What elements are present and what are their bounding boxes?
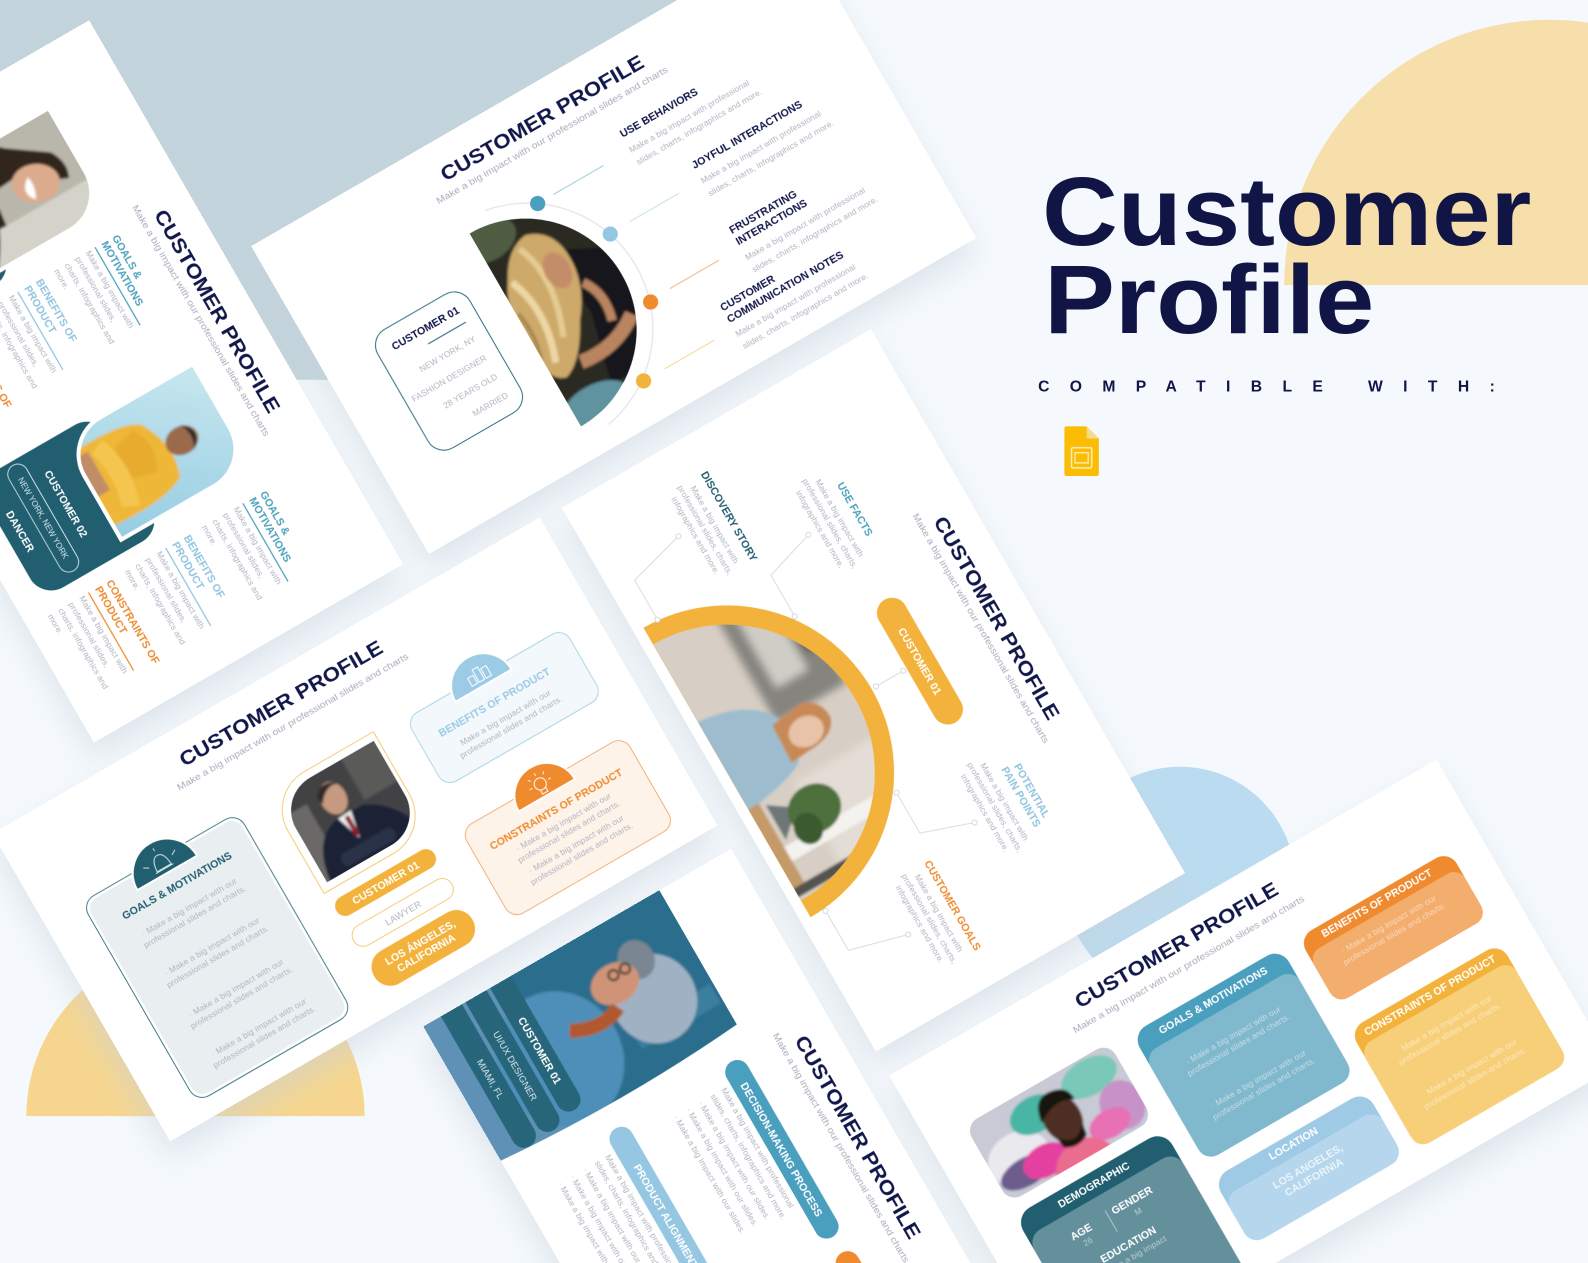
card: constraints of product <box>451 719 675 919</box>
pill: location: CALIFORNIA <box>395 932 458 975</box>
customer info box: MARRIED <box>471 390 510 418</box>
heading: CUSTOMER PROFILE <box>175 636 387 771</box>
block: decision-making process: DECISION-MAKING PROCESS <box>738 1081 824 1219</box>
card: benefits of product <box>1298 851 1488 1004</box>
card: goals and motivations: · Make a big impact with our <box>209 996 308 1059</box>
card: constraints of product: · Make a big impact with our <box>514 791 613 853</box>
item: use facts: infographics and more. <box>794 489 847 570</box>
card: goals and motivations: professional slides and charts. <box>165 923 271 990</box>
customer 01 teal tab <box>0 158 15 343</box>
card: location <box>1213 1091 1404 1245</box>
card: benefits of product: · Make a big impact with our <box>1339 893 1438 955</box>
connector: use facts <box>759 531 844 620</box>
item: customer goals: professional slides, charts, <box>900 872 959 966</box>
connector: discovery story <box>623 533 713 623</box>
heading: CUSTOMER PROFILE <box>790 1032 925 1243</box>
item: frustrating interactions: Make a big impact with professional <box>743 185 867 262</box>
card: constraints B: professional slides, <box>67 600 112 669</box>
item: customer goals: CUSTOMER GOALS <box>922 858 983 953</box>
card: benefits of product <box>395 608 603 787</box>
card: goals and motivations: professional slides and charts. <box>211 1003 317 1070</box>
customer info box: NEW YORK, NY <box>418 334 478 374</box>
block: product alignment <box>546 1122 727 1263</box>
item: use behaviors: slides, charts, infographics and more. <box>634 87 764 167</box>
pill: orange block <box>831 1247 953 1263</box>
shape: yellow semicircle top right <box>1284 20 1588 285</box>
card: constraints of product: · Make a big impact with our <box>527 812 626 875</box>
pill: occupation: LAWYER <box>383 899 424 929</box>
customer info box: FASHION DESIGNER <box>410 353 489 404</box>
card: goals and motivations B: GOALS & <box>257 489 292 538</box>
item: customer goals: Make a big impact with <box>913 873 966 954</box>
item: frustrating interactions: INTERACTIONS <box>734 197 810 248</box>
card: goals and motivations B: professional slides, <box>221 511 267 580</box>
card: benefits A: BENEFITS OF <box>33 277 79 345</box>
card: goals and motivations <box>73 798 353 1103</box>
card: benefits B: Make a big impact with <box>154 549 207 631</box>
card: benefits B: professional slides, <box>144 556 189 624</box>
subheading: Make a big impact with our professional slides and charts <box>435 65 670 207</box>
block: decision-making process: · Make a big impact with our slides. <box>672 1113 748 1236</box>
item: customer communication notes: slides, charts, infographics and more. <box>741 271 870 351</box>
location pill: NEW YORK, NEW YORK <box>16 476 70 561</box>
item: customer communication notes: Make a big impact with professional <box>734 262 857 339</box>
item: customer communication notes: CUSTOMER <box>718 273 778 314</box>
pill: city <box>441 1004 540 1152</box>
item: joyful interactions: Make a big impact with professional <box>699 109 823 186</box>
shape: blue circle bottom right <box>1064 767 1295 998</box>
pill: customer: CUSTOMER 01 <box>515 1015 563 1087</box>
panel: slide with filled cards <box>889 760 1588 1263</box>
card: benefits of product: professional slides and charts. <box>458 694 564 761</box>
card: goals and motivations B: Make a big impact with <box>232 505 284 586</box>
card: demographic: DEMOGRAPHIC <box>1056 1160 1132 1211</box>
item: potential pain points: professional slides, charts, <box>965 760 1025 854</box>
item: potential pain points <box>955 740 1060 860</box>
item: use behaviors <box>542 58 764 211</box>
title: customer profile: Profile <box>1044 245 1374 354</box>
card: constraints of product <box>1349 943 1569 1149</box>
timeline dot 2 <box>600 224 621 244</box>
pill: role <box>465 990 564 1136</box>
subheading: Make a big impact with our professional slides and charts <box>176 651 411 794</box>
item: discovery story: Make a big impact with <box>688 484 741 565</box>
card: benefits B: charts, infographics and <box>133 562 188 647</box>
customer info box: CUSTOMER 01 <box>390 305 462 353</box>
card: location: LOCATION <box>1267 1125 1320 1163</box>
card: constraints B: more. <box>46 612 65 636</box>
card: demographic: M <box>1133 1205 1144 1217</box>
card: goals and motivations A <box>52 233 166 352</box>
item: joyful interactions: slides, charts, infographics and more. <box>706 118 835 198</box>
item: use facts: professional slides, charts, <box>800 477 860 570</box>
item: discovery story: DISCOVERY STORY <box>698 469 759 564</box>
occupation label: DANCER <box>3 509 36 555</box>
card: goals and motivations A: charts, infographics and <box>63 261 117 346</box>
card: benefits B: PRODUCT <box>169 540 206 592</box>
item: discovery story: infographics and more. <box>669 495 722 576</box>
item: frustrating interactions: slides, charts, infographics and more. <box>750 194 879 274</box>
block: decision-making process: Make a big impact with professional <box>719 1086 796 1210</box>
pill: city: MIAMI, FL <box>474 1058 506 1102</box>
shape: blue-gray backdrop <box>0 0 709 380</box>
item: use facts: USE FACTS <box>834 480 875 538</box>
card: goals and motivations: · Make a big impact with our <box>163 915 261 978</box>
arc <box>485 159 698 425</box>
title: customer profile: Customer <box>1042 157 1531 266</box>
location pill <box>4 460 82 576</box>
card: constraints B: PRODUCT <box>92 584 129 637</box>
pill: location: LOS ÁNGELES, <box>383 917 458 968</box>
block: decision-making process: · Make a big impact with our slides. <box>684 1106 760 1228</box>
customer 02 label: CUSTOMER 02 <box>41 468 90 540</box>
customer pill: CUSTOMER 01 <box>895 626 943 697</box>
photo: woman with plant <box>653 624 875 900</box>
photo: man in suit <box>290 740 410 882</box>
timeline dot 1 <box>527 193 548 214</box>
photo: woman in hoodie <box>424 890 737 1161</box>
card: goals and motivations A: MOTIVATIONS <box>99 239 145 308</box>
panel: slide with circular portrait <box>562 329 1185 1051</box>
subheading: Make a big impact with our professional slides and charts <box>770 1032 911 1263</box>
item: potential pain points: infographics and more. <box>959 772 1012 853</box>
card: goals and motivations: · Make a big impact with our <box>1184 1004 1282 1066</box>
heading: CUSTOMER PROFILE <box>437 51 648 186</box>
card: constraints of product: · Make a big impact with our <box>1420 1037 1519 1099</box>
pill: location <box>365 903 482 992</box>
photo: blonde woman <box>470 218 637 426</box>
panel: slide with blue photo <box>424 849 970 1263</box>
pill: customer: CUSTOMER 01 <box>350 859 422 908</box>
subheading: Make a big impact with our professional slides and charts <box>910 512 1051 746</box>
connector: pain points <box>893 763 978 852</box>
item: use behaviors: Make a big impact with professional <box>627 77 751 155</box>
card: goals and motivations: professional slides and charts. <box>142 883 248 950</box>
card: location: LOS ANGELES, <box>1271 1142 1345 1192</box>
card: benefits of product: Make a big impact with our <box>458 687 553 748</box>
card: benefits B: BENEFITS OF <box>181 533 227 601</box>
item: discovery story <box>666 469 760 583</box>
card: goals and motivations: GOALS & MOTIVATIONS <box>120 850 234 922</box>
item: frustrating interactions <box>657 154 879 315</box>
subheading: Make a big impact with our professional slides and charts <box>1071 894 1307 1036</box>
panel: slide with two customers <box>0 20 403 742</box>
heading: CUSTOMER PROFILE <box>929 512 1064 724</box>
pill: role: UI/UX DESIGNER <box>490 1029 539 1103</box>
customer pill <box>871 592 969 730</box>
card: constraints of product: professional slides and charts. <box>1422 1044 1528 1111</box>
pill: customer <box>490 976 585 1116</box>
card: goals and motivations: · Make a big impact with our <box>140 876 239 939</box>
item: potential pain points: Make a big impact with <box>978 761 1031 843</box>
item: customer goals <box>890 858 983 971</box>
item: joyful interactions <box>619 90 835 239</box>
photo: laughing woman <box>0 110 90 268</box>
card: benefits B <box>123 533 237 653</box>
connector: pill to photo <box>873 667 907 690</box>
pill: customer <box>331 845 440 920</box>
card: goals and motivations: professional slides and charts. <box>188 964 294 1031</box>
card: benefits of product: BENEFITS OF PRODUCT <box>1320 867 1435 941</box>
item: potential pain points: POTENTIAL <box>1011 762 1052 821</box>
block: decision-making process <box>662 1055 843 1263</box>
photo frame A <box>0 105 110 287</box>
card: goals and motivations: professional slides and charts. <box>1186 1011 1292 1078</box>
item: discovery story: professional slides, charts, <box>675 483 735 577</box>
card: goals and motivations: professional slides and charts. <box>1211 1055 1317 1122</box>
item: use facts <box>790 462 885 576</box>
card: goals and motivations B: charts, infographics and <box>210 517 265 602</box>
item: customer goals: infographics and more. <box>893 884 946 965</box>
card: benefits A: Make a big impact with <box>6 293 59 375</box>
card: demographic: AGE <box>1069 1222 1094 1243</box>
customer info box <box>369 285 529 457</box>
customer info box: 28 YEARS OLD <box>441 371 499 411</box>
card: constraints B: CONSTRAINTS OF <box>103 578 162 667</box>
card: demographic: 26 <box>1081 1235 1095 1248</box>
icon: google slides <box>1064 426 1099 476</box>
photo frame <box>60 361 254 542</box>
photo: woman in yellow hoodie <box>80 366 234 537</box>
card: goals and motivations <box>1132 948 1355 1162</box>
compatible with label: COMPATIBLE WITH: <box>1038 378 1495 395</box>
card: constraints of product: CONSTRAINTS OF PRODUCT <box>1362 953 1499 1039</box>
photo: man with graffiti <box>970 1048 1148 1198</box>
card: constraints of product: CONSTRAINTS OF PRODUCT <box>488 766 625 853</box>
card: goals and motivations A: professional slides, <box>73 255 119 324</box>
card: constraints B: Make a big impact with <box>77 594 130 675</box>
photo frame <box>266 732 431 894</box>
card: goals and motivations B: more. <box>200 523 220 547</box>
card: goals and motivations A: GOALS & <box>109 233 144 282</box>
card: goals and motivations: · Make a big impact with our <box>1209 1047 1308 1110</box>
panel: slide with outlined cards <box>0 518 717 1141</box>
item: use facts: Make a big impact with <box>813 477 866 559</box>
subheading: Make a big impact with our professional slides and charts <box>129 203 271 439</box>
item: joyful interactions: JOYFUL INTERACTIONS <box>690 99 805 172</box>
card: benefits A <box>0 277 89 396</box>
card: benefits of product: professional slides and charts. <box>1341 900 1447 967</box>
shape: yellow semicircle bottom left <box>26 947 365 1116</box>
item: customer communication notes <box>650 232 870 391</box>
title: customer profile <box>1042 157 1531 354</box>
block: decision-making process: · Make a big impact with our slides. <box>696 1099 773 1221</box>
panel: slide with half-circle portrait <box>251 0 976 554</box>
card: goals and motivations B: MOTIVATIONS <box>246 495 293 564</box>
card: constraints B <box>46 578 162 700</box>
heading: CUSTOMER PROFILE <box>1071 878 1282 1013</box>
timeline dot 4 <box>633 371 654 391</box>
card: benefits of product: BENEFITS OF PRODUCT <box>437 666 553 740</box>
card: goals and motivations B <box>200 489 313 608</box>
card: benefits A: PRODUCT <box>21 284 59 336</box>
item: frustrating interactions: FRUSTRATING <box>727 188 799 237</box>
card: goals and motivations A: more. <box>52 267 72 291</box>
card: demographic: GENDER <box>1110 1184 1155 1217</box>
item: potential pain points: PAIN POINTS <box>998 765 1043 829</box>
card: constraints of product: professional slides and charts. <box>516 798 622 865</box>
heading: CUSTOMER PROFILE <box>149 206 285 417</box>
card: constraints B: charts, infographics and <box>56 606 111 691</box>
card: goals and motivations: · Make a big impact with our <box>186 956 285 1019</box>
card: benefits B: more. <box>123 568 142 592</box>
card: goals and motivations: GOALS & MOTIVATIONS <box>1157 965 1270 1037</box>
item: customer communication notes: COMMUNICATION NOTES <box>725 249 846 326</box>
card: goals and motivations A: Make a big impact with <box>84 249 136 330</box>
customer 02 teal panel <box>0 413 163 599</box>
pill: occupation <box>348 874 457 950</box>
connector: customer goals <box>822 878 912 968</box>
card: location: CALIFORNIA <box>1283 1156 1346 1199</box>
card: constraints of product: · Make a big impact with our <box>1395 993 1494 1056</box>
block: decision-making process: slides, charts, infographics and more. <box>708 1092 789 1221</box>
yellow ring <box>643 544 955 917</box>
card: demographic <box>1015 1130 1252 1263</box>
item: use behaviors: USE BEHAVIORS <box>618 86 700 141</box>
timeline dot 3 <box>640 292 661 312</box>
card: constraints of product: professional slides and charts. <box>1397 1000 1503 1067</box>
card: constraints of product: professional slides and charts. <box>529 820 635 887</box>
